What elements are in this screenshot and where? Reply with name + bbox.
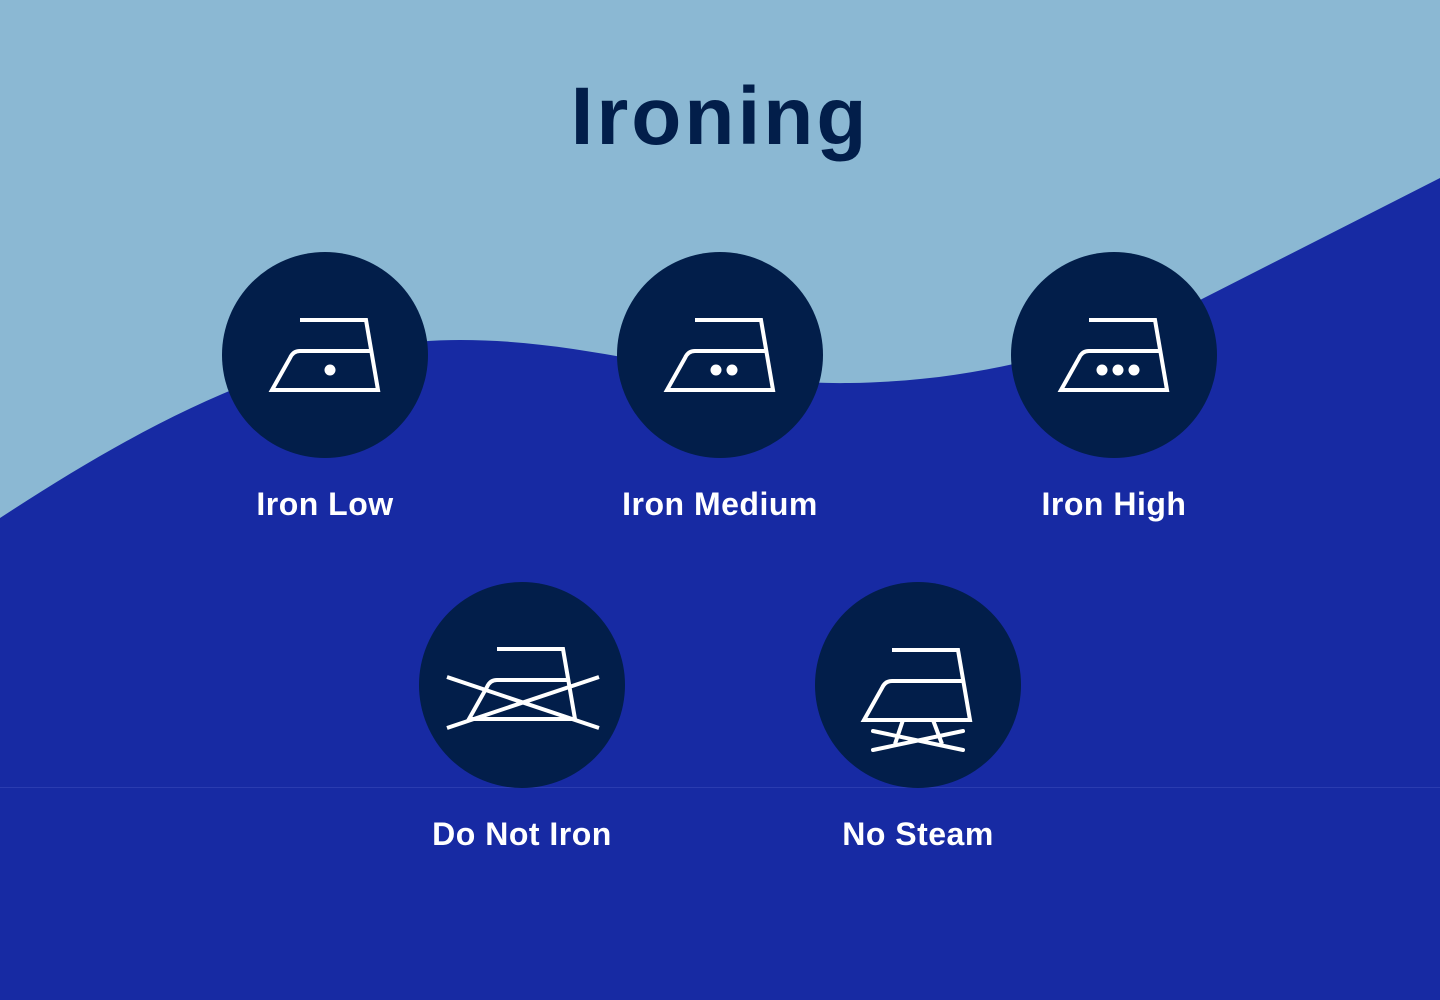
icon: iron low xyxy=(222,252,428,458)
icon: do not iron xyxy=(419,582,625,788)
icon: iron high xyxy=(1011,252,1217,458)
title: Ironing xyxy=(571,71,869,162)
label: iron low: Iron Low xyxy=(256,486,394,522)
label: iron high: Iron High xyxy=(1042,486,1186,522)
icon: no steam xyxy=(815,582,1021,788)
label: no steam: No Steam xyxy=(842,816,994,852)
label: iron medium: Iron Medium xyxy=(622,486,818,522)
label: do not iron: Do Not Iron xyxy=(432,816,612,852)
icon: iron medium xyxy=(617,252,823,458)
